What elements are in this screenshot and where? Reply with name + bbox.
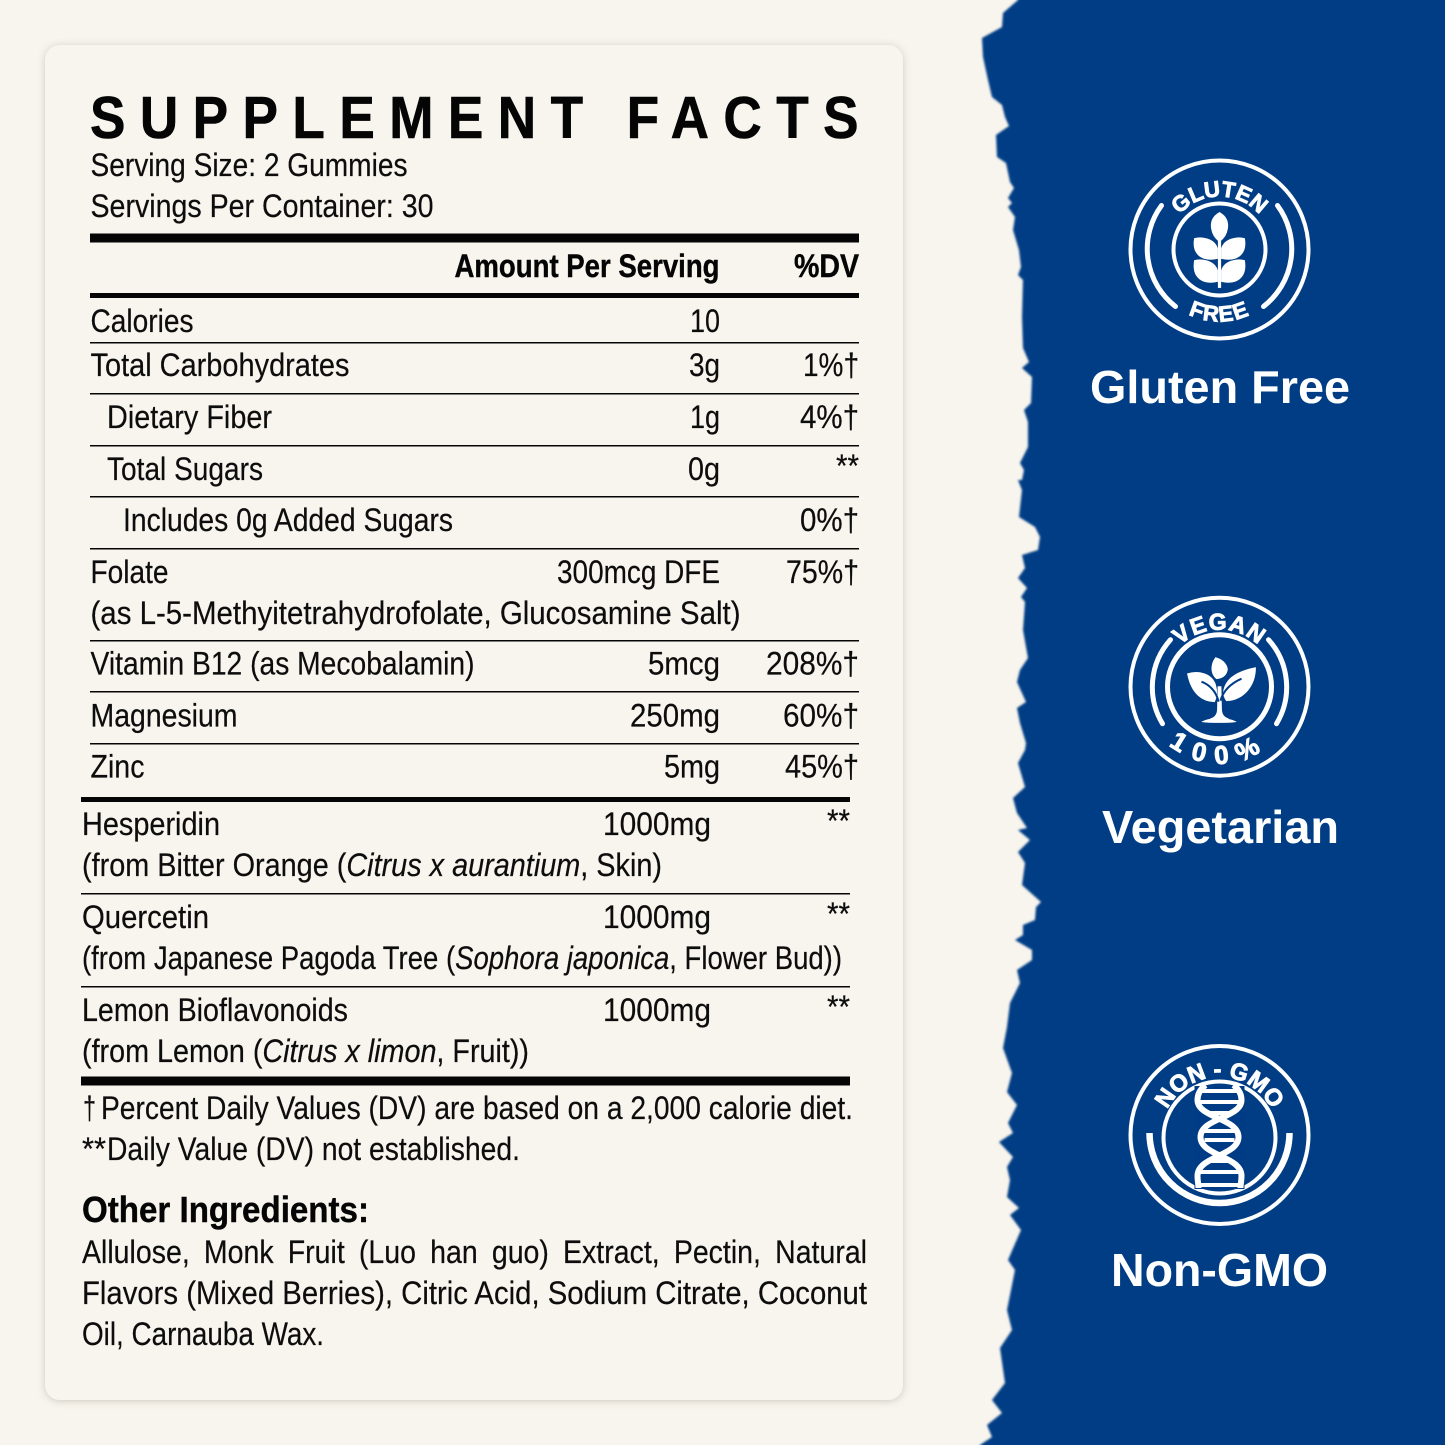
- icon: wheat: [1194, 212, 1245, 288]
- row: folate: 300mcg DFE: [557, 554, 720, 590]
- row: zinc: 45%†: [785, 748, 859, 784]
- other ingredients text: [82, 1234, 867, 1352]
- footnotes: Percent Daily Values (DV) are based on a 2,000 calorie diet.: [101, 1090, 853, 1126]
- row: quercetin: Quercetin: [82, 899, 209, 935]
- row: quercetin: **: [827, 896, 850, 932]
- row: vitamin b12: 5mcg: [648, 646, 720, 682]
- row: folate: (as L-5-Methyitetrahydrofolate, Glucosamine Salt): [90, 595, 740, 631]
- row: total carbohydrates: 3g: [689, 347, 720, 383]
- icon: sprout: [1188, 658, 1256, 722]
- icon: dna helix: [1194, 1085, 1244, 1189]
- row: hesperidin: **: [827, 803, 850, 839]
- row: calories: [90, 303, 720, 339]
- row: total sugars: 0g: [688, 451, 720, 487]
- row: folate: Folate: [90, 554, 168, 590]
- row: hesperidin: (from Bitter Orange (Citrus x aurantium, Skin): [82, 847, 662, 883]
- footnotes: [82, 1090, 853, 1167]
- label: vegetarian: Vegetarian: [1102, 801, 1339, 853]
- badge: non-gmo: NON - GMO: [1154, 1062, 1283, 1109]
- torn blue panel: [978, 0, 1445, 1445]
- row: dietary fiber: 4%†: [800, 399, 859, 435]
- table header: %DV: [794, 248, 860, 284]
- row: lemon bioflavonoids: 1000mg: [603, 992, 711, 1028]
- row: lemon bioflavonoids: Lemon Bioflavonoids: [82, 992, 348, 1028]
- title: SUPPLEMENT FACTS: [90, 85, 873, 151]
- row: total sugars: **: [836, 448, 859, 484]
- row: vitamin b12: [90, 646, 859, 682]
- row: total sugars: [107, 448, 859, 487]
- row: added sugars: Includes 0g Added Sugars: [123, 502, 453, 538]
- badge: non-gmo: [1128, 1044, 1310, 1226]
- row: lemon bioflavonoids: [82, 989, 850, 1069]
- row: hesperidin: 1000mg: [603, 806, 711, 842]
- serving info: Serving Size: 2 Gummies: [90, 147, 408, 183]
- table rules: [81, 234, 859, 1086]
- row: zinc: Zinc: [90, 748, 144, 784]
- other ingredients text: Flavors (Mixed Berries), Citric Acid, Sodium Citrate, Coconut: [82, 1275, 867, 1311]
- badge: gluten free: GLUTEN: [1172, 180, 1270, 214]
- footnotes: **: [82, 1131, 106, 1167]
- label: gluten free: Gluten Free: [1090, 361, 1350, 413]
- row: total carbohydrates: [90, 347, 859, 383]
- row: hesperidin: Hesperidin: [82, 806, 220, 842]
- serving info: [90, 147, 434, 224]
- footnotes: Daily Value (DV) not established.: [107, 1131, 520, 1167]
- row: total carbohydrates: Total Carbohydrates: [90, 347, 350, 383]
- badge: vegan: VEGAN: [1170, 613, 1267, 644]
- row: lemon bioflavonoids: **: [827, 989, 850, 1025]
- row: added sugars: [123, 502, 859, 538]
- row: magnesium: Magnesium: [90, 698, 238, 734]
- row: calories: Calories: [90, 303, 194, 339]
- row: quercetin: [82, 896, 850, 976]
- row: zinc: [90, 748, 859, 784]
- badge: vegan: 100%: [1169, 733, 1260, 765]
- row: folate: 75%†: [786, 554, 859, 590]
- other ingredients heading: Other Ingredients:: [82, 1189, 369, 1230]
- row: quercetin: (from Japanese Pagoda Tree (Sophora japonica, Flower Bud)): [82, 940, 842, 976]
- row: added sugars: 0%†: [800, 502, 859, 538]
- row: lemon bioflavonoids: (from Lemon (Citrus x limon, Fruit)): [82, 1033, 529, 1069]
- panel: supplement facts: [45, 45, 903, 1400]
- row: zinc: 5mg: [664, 748, 720, 784]
- serving info: Servings Per Container: 30: [90, 188, 434, 224]
- badge: gluten free: FREE: [1189, 300, 1250, 322]
- row: total carbohydrates: 1%†: [803, 347, 859, 383]
- card background: [45, 45, 903, 1400]
- label: non-gmo: Non-GMO: [1111, 1244, 1328, 1296]
- row: quercetin: 1000mg: [603, 899, 711, 935]
- row: vitamin b12: Vitamin B12 (as Mecobalamin): [90, 646, 474, 682]
- row: total sugars: Total Sugars: [107, 451, 263, 487]
- table header: Amount Per Serving: [454, 248, 720, 284]
- row: dietary fiber: 1g: [690, 399, 720, 435]
- row: dietary fiber: [107, 399, 859, 435]
- badge: gluten free: [1128, 158, 1310, 340]
- other ingredients text: Allulose, Monk Fruit (Luo han guo) Extract, Pectin, Natural: [82, 1234, 867, 1270]
- row: hesperidin: [82, 803, 850, 883]
- footnotes: †: [83, 1090, 96, 1126]
- row: dietary fiber: Dietary Fiber: [107, 399, 272, 435]
- row: calories: 10: [690, 303, 720, 339]
- row: vitamin b12: 208%†: [766, 646, 859, 682]
- other ingredients text: Oil, Carnauba Wax.: [82, 1316, 324, 1352]
- row: magnesium: 250mg: [630, 698, 720, 734]
- badge: vegan: [1128, 596, 1310, 778]
- row: magnesium: 60%†: [783, 698, 859, 734]
- row: magnesium: [90, 698, 859, 734]
- row: folate: [90, 554, 859, 631]
